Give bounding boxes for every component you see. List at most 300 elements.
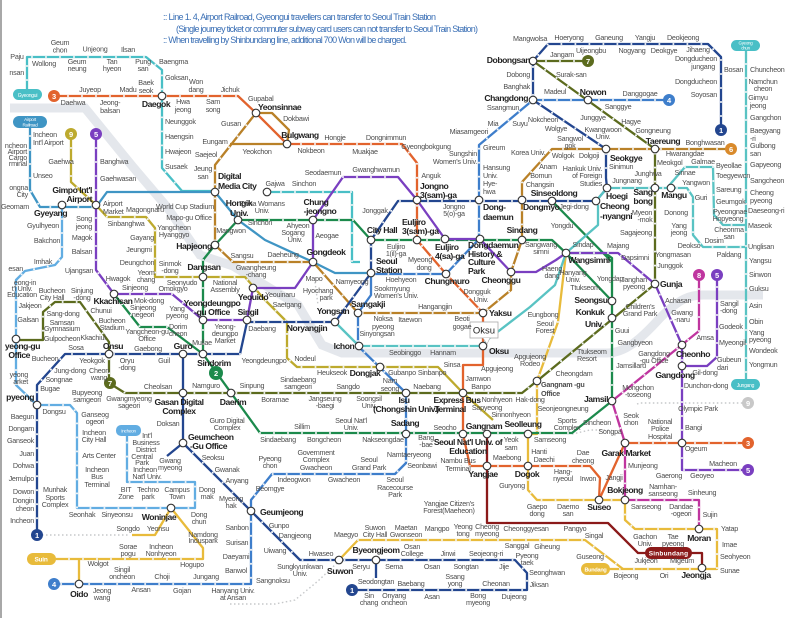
station labels: centre: Itaewon — [398, 315, 422, 324]
station labels: north-east: Wondeok — [749, 346, 778, 355]
station labels: north-centre: Chung — [304, 197, 329, 207]
station labels: north-west: Saejeol — [195, 150, 218, 159]
station labels: north-west: Neunggok — [165, 117, 196, 126]
station labels: centre: Maebong — [493, 453, 521, 462]
station labels: north-west: Daehwa — [61, 98, 86, 107]
station labels: west and south-west: Namdong — [188, 530, 218, 539]
station labels: north-west: Gaehwa — [48, 157, 74, 166]
station labels: south-east: Ttukseom — [577, 347, 607, 356]
station labels: west and south-west: Nat'l Univ. — [132, 472, 162, 481]
line badges and pills: 5 — [715, 271, 719, 280]
station labels: north-west: Airport — [66, 194, 93, 204]
station labels: centre: Naebang — [413, 382, 441, 391]
station labels: north-centre: Muakjae — [352, 147, 378, 156]
station labels: north-west: Airport — [8, 147, 27, 156]
station labels: north-east: jeong — [670, 228, 687, 237]
station labels: centre: Univ. — [362, 401, 377, 410]
station labels: centre: Nam — [383, 376, 397, 385]
station labels: west and south-west: arket — [13, 377, 28, 386]
station labels: west and south-west: Onsu — [103, 341, 123, 351]
station labels: west and south-west: Cheolsan — [144, 382, 172, 391]
station labels: north-west: Juyeop — [79, 85, 101, 94]
station labels: west and south-west: park — [142, 492, 155, 501]
station labels: west and south-west: Gaebong — [134, 344, 162, 353]
station labels: south-east: Namhan- — [649, 482, 678, 491]
station labels: north-west: Magongnaru — [126, 205, 164, 214]
station labels: centre: -chang — [246, 270, 266, 279]
station labels: west and south-west: negeori — [132, 310, 155, 319]
station labels: west and south-west: Anyang — [226, 476, 249, 485]
station labels: north-east: of Foreign — [572, 171, 602, 180]
station labels: centre: Seoul — [386, 475, 404, 484]
station labels: north-west: Haengsin — [165, 132, 194, 141]
station labels: centre: Sadang — [391, 418, 419, 428]
station labels: south-east: Bokjeong — [607, 485, 643, 495]
station labels: north-east: Galmae — [691, 157, 715, 166]
station labels: south-east: Dandae — [669, 502, 693, 511]
station labels: west and south-west: Sports — [45, 493, 65, 502]
station labels: centre: Mapo — [306, 274, 323, 283]
station labels: north-east: Obin — [749, 317, 763, 326]
station labels: west and south-west: cheon — [169, 329, 187, 338]
line 7 — [16, 61, 655, 393]
station labels: west and south-west: pyeong — [166, 311, 188, 320]
station labels: south-east: Singal — [585, 531, 604, 540]
station labels: north-east: jungang — [690, 62, 715, 71]
station labels: centre: Yeouinaru — [265, 290, 295, 299]
station labels: south-east: Amsa — [696, 333, 714, 342]
station labels: north-east: Yangwon — [682, 178, 710, 187]
station labels: west and south-west: Hanyang Univ. — [211, 586, 255, 595]
station labels: south-east: Macheon — [709, 459, 737, 468]
station labels: north-west: Bakchon — [34, 236, 60, 245]
station labels: south-east: Bojeong — [614, 571, 639, 580]
station labels: south-east: san — [563, 509, 574, 518]
station labels: north-west: Daegok — [142, 99, 171, 109]
station labels: south-east: Tae — [668, 532, 679, 541]
line badges and pills: 9 — [746, 399, 750, 408]
station labels: south-east: -dong — [720, 306, 737, 315]
station labels: west and south-west: Guro Digital — [210, 416, 245, 425]
station labels: north-west: World Cup Stadium — [156, 202, 214, 211]
station labels: west and south-west: pogu — [120, 549, 136, 558]
station labels: north-centre: Bulgwang — [281, 130, 319, 140]
station labels: north-east: Sinimun — [609, 162, 633, 171]
station labels: centre: Sinbanpo — [418, 368, 446, 377]
station labels: south-east: dong — [530, 509, 545, 518]
station labels: centre: Yeongdeungpo — [241, 356, 287, 365]
station labels: north-east: Namchun — [748, 77, 778, 86]
station labels: west and south-west: Seonhak — [69, 510, 96, 519]
station labels: north-east: Sangcheon — [750, 176, 784, 185]
station labels: centre: Yeongdeungpo — [184, 298, 241, 308]
station labels: west and south-west: Oido — [70, 589, 88, 599]
station labels: centre: Assembly — [210, 285, 240, 294]
line: incheon 1 — [16, 205, 195, 508]
station labels: centre: Bang — [418, 433, 434, 442]
station labels: west and south-west: Sinjeong — [130, 303, 156, 312]
station labels: south: Suwon — [327, 566, 353, 576]
station labels: west and south-west: Dongsu — [42, 407, 66, 416]
station labels: south: Suwon — [365, 523, 386, 532]
station labels: west and south-west: yeong-gu — [5, 341, 40, 351]
station labels: south-east: Gangnam -gu — [541, 380, 585, 389]
line 8 — [612, 275, 699, 529]
station labels: south: taek — [521, 558, 534, 567]
station labels: west and south-west: Town — [169, 492, 185, 501]
station labels: north-west: neung — [68, 64, 87, 73]
station labels: centre: Dogok — [515, 469, 540, 479]
station labels: south: Cheonan — [482, 579, 510, 588]
station labels: centre: Gubanpo — [388, 368, 416, 377]
station labels: north-centre: City Hall — [367, 225, 397, 235]
station labels: north-centre: Mia — [488, 119, 499, 128]
station labels: west and south-west: Daeyami — [223, 552, 250, 561]
station labels: north-centre: Hansung — [483, 163, 510, 172]
station labels: west and south-west: myeong — [158, 463, 182, 472]
station labels: north-centre: Sinchon — [292, 179, 316, 188]
station labels: south: Seryu — [352, 562, 370, 571]
station labels: north-east: simni — [533, 247, 549, 256]
station labels: north-east: Mangu — [661, 190, 687, 200]
station labels: south: Maetan — [395, 523, 417, 532]
station labels: north-east: Guksu — [749, 284, 769, 293]
station labels: south: Byeongjeom — [352, 545, 400, 555]
station labels: north-east: Deokgye — [651, 46, 678, 55]
station labels: centre: Complex — [303, 455, 330, 464]
station labels: west and south-west: at Ansan — [220, 593, 246, 602]
station labels: west and south-west: Sang-dong — [47, 309, 80, 318]
station labels: north-centre: Banghak — [503, 82, 531, 91]
station labels: south-east: Jangji — [605, 473, 623, 482]
station labels: north-centre: Univ. — [288, 235, 303, 244]
station labels: centre: Yeok — [504, 435, 519, 444]
station labels: north-centre: Sungshin — [449, 149, 477, 158]
station labels: west and south-west: Office — [138, 334, 156, 343]
station labels: north-west: jeong — [174, 105, 191, 114]
station labels: north-west: Eungam — [202, 137, 228, 146]
station labels: north-east: Dosim — [704, 236, 724, 245]
station labels: north-east: Gapyeong — [750, 160, 781, 169]
station labels: north-west: hyeon — [103, 64, 121, 73]
station labels: south-east: Sincheon — [583, 418, 611, 427]
station labels: south-east: Gaerong — [656, 471, 682, 480]
station labels: centre: Apgujeong — [481, 364, 513, 373]
station labels: west and south-west: Jungang — [193, 572, 219, 581]
station labels: centre: Saetgang — [273, 300, 302, 309]
line 4 — [54, 100, 669, 584]
station labels: north-east: Taereung — [646, 136, 680, 146]
station labels: north-centre: History & — [468, 249, 502, 259]
station labels: west and south-west: Yeokgok — [79, 356, 105, 365]
station labels: north-east: Univ. — [596, 132, 611, 141]
station labels: north-centre: Station — [376, 265, 402, 275]
station labels: centre: seong — [381, 384, 399, 393]
station labels: north-west: Sinbanghwa — [107, 219, 145, 228]
station labels: north-centre: Park — [468, 266, 486, 276]
station labels: west and south-west: Incheon — [149, 542, 173, 551]
station labels: north-west: Imhak — [34, 257, 53, 266]
station labels: north-east: Sinwon — [749, 270, 771, 279]
station labels: west and south-west: Dong — [191, 510, 207, 519]
station labels: north-west: Jeungmi — [126, 245, 152, 254]
station labels: north-west: chon — [53, 46, 68, 54]
station labels: south-east: Moran — [687, 533, 711, 543]
station labels: south: Baebang — [397, 579, 425, 588]
station labels: north-centre: Women's Univ. — [433, 157, 477, 166]
station labels: west and south-west: Samsan — [50, 318, 75, 327]
station labels: west and south-west: Myeong — [219, 494, 243, 503]
station labels: west and south-west: Ganseog — [81, 410, 109, 419]
station labels: south-east: Cheonho — [676, 349, 710, 359]
station labels: centre: chon — [263, 461, 278, 470]
station labels: south-east: Sujin — [703, 510, 718, 519]
station labels: south: Yeong — [454, 522, 473, 531]
line badges and pills: 1 — [350, 586, 354, 595]
line: jungang and gyeongchun — [335, 50, 746, 380]
station labels: west and south-west: Jeong — [93, 586, 111, 595]
station labels: north-east: Yongmun — [749, 360, 778, 369]
station labels: north-east: Chuncheon — [750, 65, 785, 74]
station labels: centre: Oksu — [489, 346, 509, 356]
line 5 — [96, 134, 748, 470]
station labels: centre: Singil — [238, 307, 258, 317]
station labels: north-east: Jungnang — [612, 176, 642, 185]
station labels: west and south-west: Bucheon — [39, 286, 66, 295]
station labels: north-west: Yeokchon — [242, 147, 272, 156]
station labels: centre: Seoul Nat'l Univ. of — [434, 437, 503, 447]
station labels: south-east: Daechi — [534, 455, 555, 464]
station labels: south: chang — [360, 598, 378, 607]
station labels: south-east: Sinheung — [688, 488, 716, 497]
station labels: centre: sam — [505, 443, 518, 452]
station labels: north-centre: Culture — [468, 257, 496, 267]
station labels: west and south-west: Gwangmyeong — [106, 394, 152, 403]
station labels: north-east: Nogyang — [618, 46, 646, 55]
station labels: north-centre: Nokbeon — [297, 146, 325, 155]
station labels: centre: Gangnam — [466, 421, 503, 431]
station labels: north-centre: Sogang — [281, 228, 305, 237]
line badges and pills: 7 — [108, 379, 112, 388]
station labels: south: Ssang — [445, 572, 465, 581]
station labels: north-centre: Mangwolsa — [513, 34, 547, 43]
station labels: south-east: Achasan — [665, 296, 691, 305]
station labels: north-east: Wolgok — [552, 151, 575, 160]
station labels: north-east: Majang — [607, 241, 629, 250]
station labels: south: Maegyo — [334, 530, 358, 539]
station labels: north-east: Surak-san — [556, 70, 587, 79]
station labels: west and south-west: wang — [90, 373, 107, 382]
station labels: south-east: Cheongdam — [556, 369, 593, 378]
station labels: north-west: Media City — [218, 181, 257, 191]
station labels: centre: Yeong- — [214, 322, 236, 331]
line 3 — [54, 96, 748, 500]
station labels: south-east: pyeong — [662, 539, 684, 548]
station labels: centre: Terminal — [445, 464, 471, 473]
oksu callout — [470, 322, 498, 344]
station labels: west and south-west: Sinjeong — [122, 283, 148, 292]
station labels: centre: Hangangjin — [418, 302, 452, 311]
station labels: west and south-west — [5, 278, 290, 602]
station labels: north-east: Sanggye — [605, 102, 632, 111]
station labels: north-west: ncheon — [5, 141, 27, 150]
station labels: south-east: Sanseong — [631, 502, 661, 511]
station labels: north-east: Junghwa — [634, 169, 662, 178]
station labels: north-east: bong — [633, 196, 653, 206]
station labels: north-centre: Dokbawi — [283, 114, 310, 123]
station labels: west and south-west: Gasan Digital — [154, 397, 204, 407]
station labels: north-east: Soyosan — [691, 90, 717, 99]
station labels: west and south-west: Park — [135, 458, 150, 467]
station labels: north-east: Danggogae — [623, 89, 658, 98]
station labels: west and south-west: -dong — [73, 293, 91, 302]
station labels: north-centre: Changdong — [484, 93, 528, 103]
station labels: south-east: Gaepo — [527, 502, 547, 511]
station labels: north-east: Bonghwasan — [685, 138, 725, 147]
station labels: south: Hwaseo — [309, 549, 333, 558]
line badges and pills: Incheon — [121, 428, 136, 434]
station labels: south-east: Rodeo — [520, 359, 540, 368]
station labels: south-east: Eungbong — [528, 310, 559, 319]
station labels: centre: Racecourse — [377, 483, 413, 492]
station labels: north-east: Wolgye — [545, 124, 567, 133]
station labels: west and south-west: Bucheon — [99, 316, 126, 325]
station labels: north-east: Janghan — [621, 275, 647, 284]
line badges and pills: Sinbundang — [649, 550, 688, 558]
station labels: centre: Sillim — [294, 422, 310, 431]
station labels: west and south-west: Arts Center — [82, 451, 117, 460]
station labels: centre: Nonhyeon — [482, 395, 513, 404]
station labels: north-east: Hwarangdae — [666, 149, 704, 158]
station labels: west and south-west: Incheon — [10, 516, 34, 525]
station labels: south: Seonghwan — [529, 568, 565, 577]
station labels: south-east: Yatap — [721, 524, 738, 533]
station labels: west and south-west: Zone — [118, 492, 134, 501]
station labels: north-east: pyeong — [750, 196, 772, 205]
station labels: north-west: balsan — [100, 106, 120, 115]
station labels: south: Dujeong — [501, 592, 527, 601]
station labels: centre: Boramae — [261, 395, 289, 404]
station labels: south: Giheung — [534, 542, 560, 551]
station labels: west and south-west: Songnae — [45, 375, 73, 384]
station labels: centre: Seoul Nat'l — [335, 416, 368, 425]
station labels: centre: -bae — [419, 440, 433, 449]
station labels: north-east: Sareung — [716, 185, 742, 194]
station labels: centre: Gwacheon — [328, 475, 360, 484]
station labels: south: myeong — [466, 598, 490, 607]
station labels: north-east: Nowon — [580, 87, 606, 97]
station labels: north-centre: Univ. — [483, 171, 498, 180]
station labels: south: Sungkyunkwan — [277, 562, 323, 571]
line badges and pills: 3 — [52, 92, 56, 101]
station labels: north-east: Junggye — [580, 113, 606, 122]
station labels: west and south-west: Kkachisan — [94, 296, 133, 306]
station labels: north-east: pyeong — [749, 335, 771, 344]
station labels: west and south-west: Mok-dong — [134, 296, 164, 305]
station labels: west and south-west: Gwang — [159, 456, 181, 465]
station labels: north-east: Cheong — [600, 201, 629, 211]
station labels: south: Osan — [424, 562, 440, 571]
station labels: north-east: Ttukseom — [570, 283, 600, 292]
station labels: west and south-west: Gymnasium — [44, 324, 80, 333]
station labels: north-west: Ilsan — [121, 45, 135, 54]
station labels: west and south-west: Gojan — [173, 586, 191, 595]
station labels: north-centre: -jeongno — [304, 206, 337, 216]
station labels: north-centre: Ahyeon — [287, 221, 310, 230]
line badges and pills: 5 — [94, 130, 98, 139]
station labels: north-west: Hyanggyo — [159, 230, 189, 239]
station labels: centre: Sangdo — [336, 382, 360, 391]
station labels: south-east: Irwon — [580, 474, 596, 483]
station labels: north-west: Geum — [51, 38, 70, 47]
station labels: north-east: Bomun — [530, 171, 552, 180]
station labels: centre: Dongjak — [350, 368, 381, 378]
station labels: west and south-west: Terminal — [84, 480, 110, 489]
station labels: south: College — [401, 549, 424, 558]
station labels: west and south-west: t'l Univ. — [12, 284, 33, 293]
station labels: south-east: Seohyeon — [720, 552, 751, 561]
station labels: north-west: Sam — [206, 97, 220, 106]
station labels: south: Songtan — [453, 562, 479, 571]
station labels: south-east: Seongsu — [574, 295, 608, 305]
station labels: south: Jinwi — [441, 549, 456, 558]
station labels: north-west: Song — [76, 214, 92, 223]
station labels: north-east: san — [724, 232, 735, 241]
station labels: south-east: Seoul — [536, 319, 554, 328]
station labels: centre: Sindaebang — [280, 375, 316, 384]
station labels: west and south-west: BIT — [121, 485, 132, 494]
station labels: north-east: Sang — [633, 187, 653, 197]
station labels: south-east: -naru — [674, 315, 690, 324]
transfer notice: :: Line 1. 4, Airport Railroad, Gyeongui travellers can transfer to Seoul Train Station — [163, 12, 436, 22]
station labels: north-west: ongna — [9, 183, 28, 192]
station labels: north-east: Yang — [749, 328, 765, 337]
dotted planned lines — [38, 282, 748, 604]
station labels: south-east: cheong — [572, 456, 594, 465]
station labels: north-east: Deokjeong — [667, 33, 699, 42]
station labels: west and south-west: Sangnoksu — [256, 576, 290, 585]
station labels: north-east: Toegyewon — [716, 171, 750, 180]
station labels: centre: Yaksu — [489, 308, 512, 318]
station labels: south-east: Gangbyeon — [618, 338, 653, 347]
station labels: south-east: Gangdong — [638, 349, 670, 358]
station labels: south: Sema — [385, 562, 403, 571]
station labels: west and south-west: Complex — [42, 500, 69, 509]
station labels: west and south-west: Juan — [19, 449, 34, 458]
station labels: north-east: gok — [565, 141, 576, 150]
station labels: south: Cheong — [475, 522, 499, 531]
station labels: north-centre: Sindang — [507, 225, 538, 235]
line 1 — [37, 44, 721, 590]
station labels: south: Gunpo — [269, 521, 289, 530]
station labels: north-west: Geomam — [1, 202, 29, 211]
station labels: west and south-west: Sorae — [119, 542, 137, 551]
station labels: north-west: san — [138, 64, 149, 73]
station labels: centre: Terminal — [434, 404, 466, 414]
station labels: north-centre: 3(sam)-ga — [402, 226, 439, 236]
station labels: centre: Univ. — [344, 423, 359, 432]
station labels: south-east: Police — [651, 424, 669, 433]
station labels: centre: Forest(Maeheon) — [423, 506, 475, 515]
station labels: south: Sin — [364, 591, 374, 600]
station labels: south-east: nyeoul — [553, 474, 573, 483]
line: bundang and shinbundang feeder — [528, 253, 717, 569]
station labels: north-centre: Chungmuro — [425, 276, 470, 286]
station labels: centre — [184, 263, 542, 515]
station labels: north-east: Hankuk Univ. — [563, 164, 602, 173]
station labels: north-centre: Hongje — [324, 133, 346, 142]
station labels: south-east: -toseong — [625, 390, 651, 399]
